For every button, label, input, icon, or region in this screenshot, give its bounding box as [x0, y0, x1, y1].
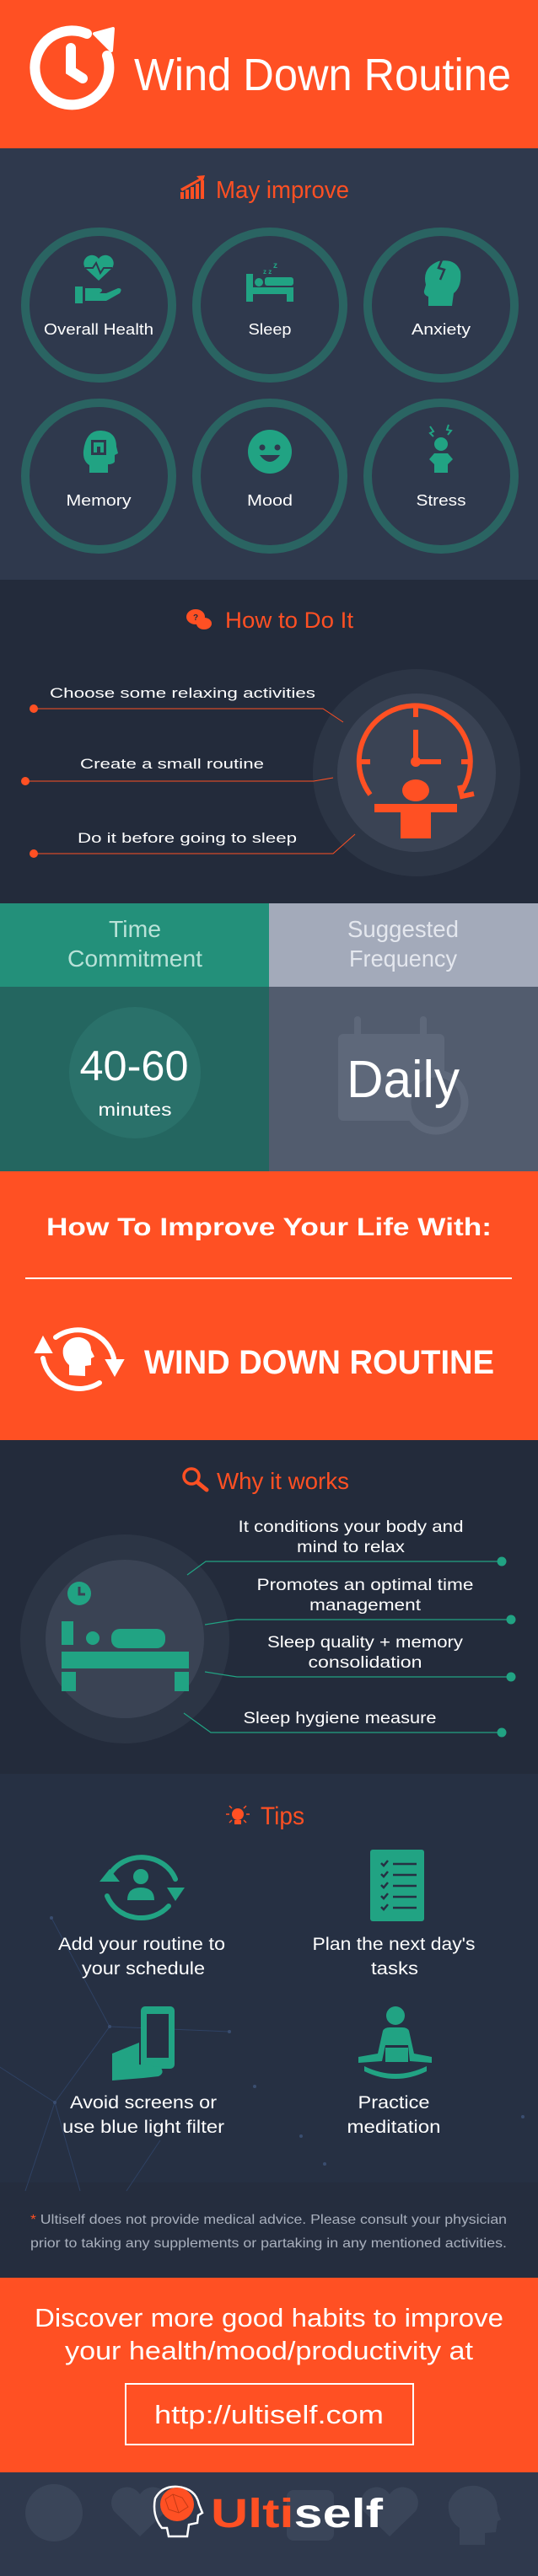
tip: add routine to schedule: [58, 1857, 225, 1979]
benefit: sleep: z z: [263, 268, 272, 276]
benefit: mood: Mood: [247, 492, 293, 509]
reason 1: mind to relax: [297, 1539, 406, 1556]
disclaimer: [30, 2213, 507, 2251]
section: how to do it: [21, 608, 520, 876]
call to action: your health/mood/productivity at: [65, 2336, 473, 2365]
tip: plan next day's tasks: [312, 1850, 476, 1979]
reason 4: [184, 1710, 506, 1738]
benefit: overall health: [25, 232, 172, 378]
banner: how to improve your life: WIND DOWN ROUTINE: [144, 1344, 494, 1381]
panel: time commitment: Time: [109, 916, 161, 942]
reason 3: Sleep quality + memory: [267, 1634, 464, 1652]
reason 2: Promotes an optimal time: [256, 1577, 474, 1594]
step 3: [30, 830, 355, 858]
tip: plan next day's tasks: Plan the next day's: [312, 1935, 476, 1954]
benefit: stress: [368, 403, 514, 549]
benefit: stress: Stress: [417, 492, 465, 509]
tip: avoid screens: Avoid screens or: [70, 2093, 217, 2113]
heading: tips: [226, 1802, 304, 1830]
title text: Wind Down Routine: [134, 50, 511, 100]
benefit: sleep: z: [273, 261, 277, 270]
tip: add routine to schedule: Add your routine to: [58, 1935, 225, 1954]
section: tips: [0, 1802, 525, 2191]
step 2: Create a small routine: [80, 756, 264, 772]
step 1: [30, 685, 343, 722]
benefit: sleep: [196, 232, 343, 378]
section: why it works: [20, 1468, 516, 1743]
illustration: bed: [20, 1534, 229, 1743]
reason 2: [205, 1577, 516, 1625]
benefit: anxiety: [368, 232, 514, 378]
reason 3: consolidation: [309, 1654, 422, 1672]
logo text: Ulti self: [211, 2492, 384, 2536]
illustration: clock with person: [313, 669, 520, 876]
banner: how to improve your life: How To Improve Your Life With:: [46, 1213, 492, 1241]
disclaimer: prior to taking any supplements or partaking in any mentioned activities.: [30, 2236, 507, 2251]
reason 1: [187, 1518, 506, 1575]
icon: head with cycle arrows: [35, 1330, 123, 1389]
button: url: http://ultiself.com: [154, 2400, 384, 2429]
call to action: [35, 2303, 503, 2445]
tip: avoid screens: use blue light filter: [62, 2118, 224, 2137]
benefit: anxiety: Anxiety: [412, 321, 471, 338]
header: title: [35, 29, 511, 104]
tip: meditation: [347, 2006, 440, 2137]
panel: time commitment: minutes: [98, 1101, 172, 1120]
benefit: memory: Memory: [66, 492, 132, 509]
logo mark: brain head: [154, 2487, 202, 2536]
reason 2: management: [309, 1597, 422, 1615]
step 1: Choose some relaxing activities: [50, 685, 315, 701]
panel: time commitment: Commitment: [67, 945, 202, 972]
panel: suggested frequency: Suggested: [347, 916, 459, 942]
step 2: [21, 756, 333, 785]
heading: tips: Tips: [261, 1802, 304, 1830]
heading: may improve: May improve: [216, 177, 349, 204]
heading: how to do it: How to Do It: [225, 608, 354, 633]
panel: time commitment: 40-60: [79, 1042, 189, 1090]
panel: suggested frequency: [269, 903, 538, 1171]
panel: suggested frequency: Daily: [347, 1051, 460, 1109]
benefit: mood: [196, 403, 343, 549]
footer: logo: [25, 2484, 501, 2545]
tip: plan next day's tasks: tasks: [371, 1959, 418, 1979]
tip: avoid screens: [62, 2006, 224, 2137]
heading: how to do it: ?: [193, 613, 198, 623]
call to action: Discover more good habits to improve: [35, 2303, 503, 2332]
banner: how to improve your life: [25, 1213, 512, 1389]
icon: clock with arrow: [35, 29, 113, 104]
reason 1: It conditions your body and: [238, 1518, 464, 1536]
benefit: overall health: Overall Health: [44, 321, 153, 338]
section: may improve: [25, 175, 514, 549]
benefit: sleep: Sleep: [248, 321, 292, 338]
tip: meditation: Practice: [358, 2093, 430, 2113]
benefit: memory: [25, 403, 172, 549]
heading: why it works: Why it works: [217, 1468, 349, 1494]
button: url: [126, 2384, 413, 2445]
step 3: Do it before going to sleep: [78, 830, 297, 846]
reason 3: [205, 1634, 516, 1682]
disclaimer: * Ultiself does not provide medical advice. Please consult your physician: [30, 2213, 507, 2227]
reason 4: Sleep hygiene measure: [243, 1710, 437, 1727]
tip: meditation: meditation: [347, 2118, 440, 2137]
panel: suggested frequency: Frequency: [349, 945, 457, 972]
panel: time commitment: [0, 903, 269, 1171]
tip: add routine to schedule: your schedule: [82, 1959, 205, 1979]
